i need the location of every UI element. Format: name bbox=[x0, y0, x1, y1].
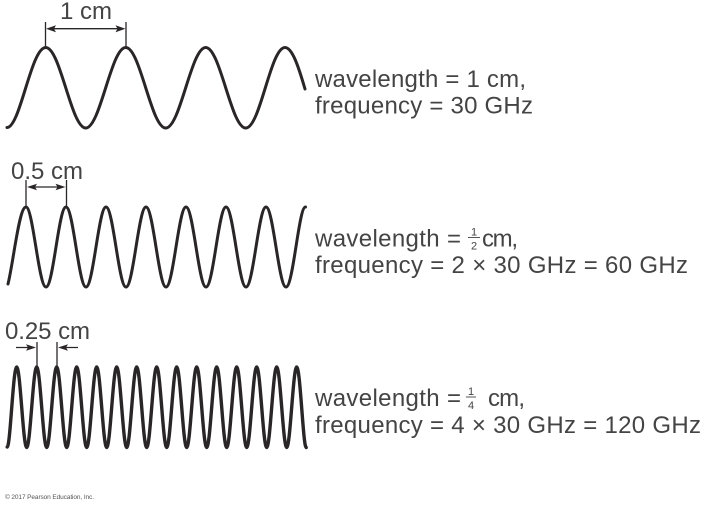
fraction: one half: 1 bbox=[471, 226, 477, 238]
copyright note: © 2017 Pearson Education, Inc. bbox=[5, 493, 94, 501]
text: wavelength and frequency for 0.25 cm: cm, bbox=[488, 385, 525, 412]
dimension: 0.25 cm arrows bbox=[16, 342, 78, 367]
text: wavelength and frequency for 0.5 cm bbox=[314, 226, 688, 279]
wave: wavelength 0.25 cm bbox=[7, 367, 306, 448]
panel: 0.5 cm wave bbox=[8, 158, 688, 287]
text: wavelength and frequency for 0.5 cm: cm, bbox=[482, 226, 518, 252]
panel: 1 cm wave bbox=[7, 0, 533, 128]
wave: wavelength 0.5 cm bbox=[8, 207, 306, 287]
dimension: 0.5 cm arrow bbox=[26, 180, 66, 207]
fraction: one half bbox=[468, 226, 480, 252]
text: wavelength and frequency for 0.25 cm: wavelength = bbox=[314, 385, 461, 412]
label: 0.5 cm: 0.5 cm bbox=[11, 158, 83, 185]
fraction: one quarter: 4 bbox=[468, 400, 474, 412]
text: wavelength and frequency for 1 cm: wavelength = 1 cm, bbox=[314, 66, 526, 93]
fraction: one quarter: 1 bbox=[468, 386, 474, 398]
fraction: one half: 2 bbox=[471, 240, 477, 252]
text: wavelength and frequency for 0.5 cm: frequency = 2 × 30 GHz = 60 GHz bbox=[315, 252, 688, 279]
label: 0.25 cm: 0.25 cm bbox=[5, 318, 90, 345]
text: wavelength and frequency for 1 cm: frequency = 30 GHz bbox=[315, 92, 533, 120]
dimension: 1 cm arrow bbox=[46, 22, 126, 47]
fraction: one quarter bbox=[466, 386, 476, 412]
text: wavelength and frequency for 0.25 cm bbox=[314, 385, 701, 439]
text: wavelength and frequency for 0.5 cm: wavelength = bbox=[314, 226, 461, 252]
text: wavelength and frequency for 1 cm bbox=[314, 66, 533, 120]
wave: wavelength 1 cm bbox=[7, 48, 305, 128]
text: wavelength and frequency for 0.25 cm: frequency = 4 × 30 GHz = 120 GHz bbox=[315, 412, 701, 439]
panel: 0.25 cm wave bbox=[5, 318, 701, 448]
